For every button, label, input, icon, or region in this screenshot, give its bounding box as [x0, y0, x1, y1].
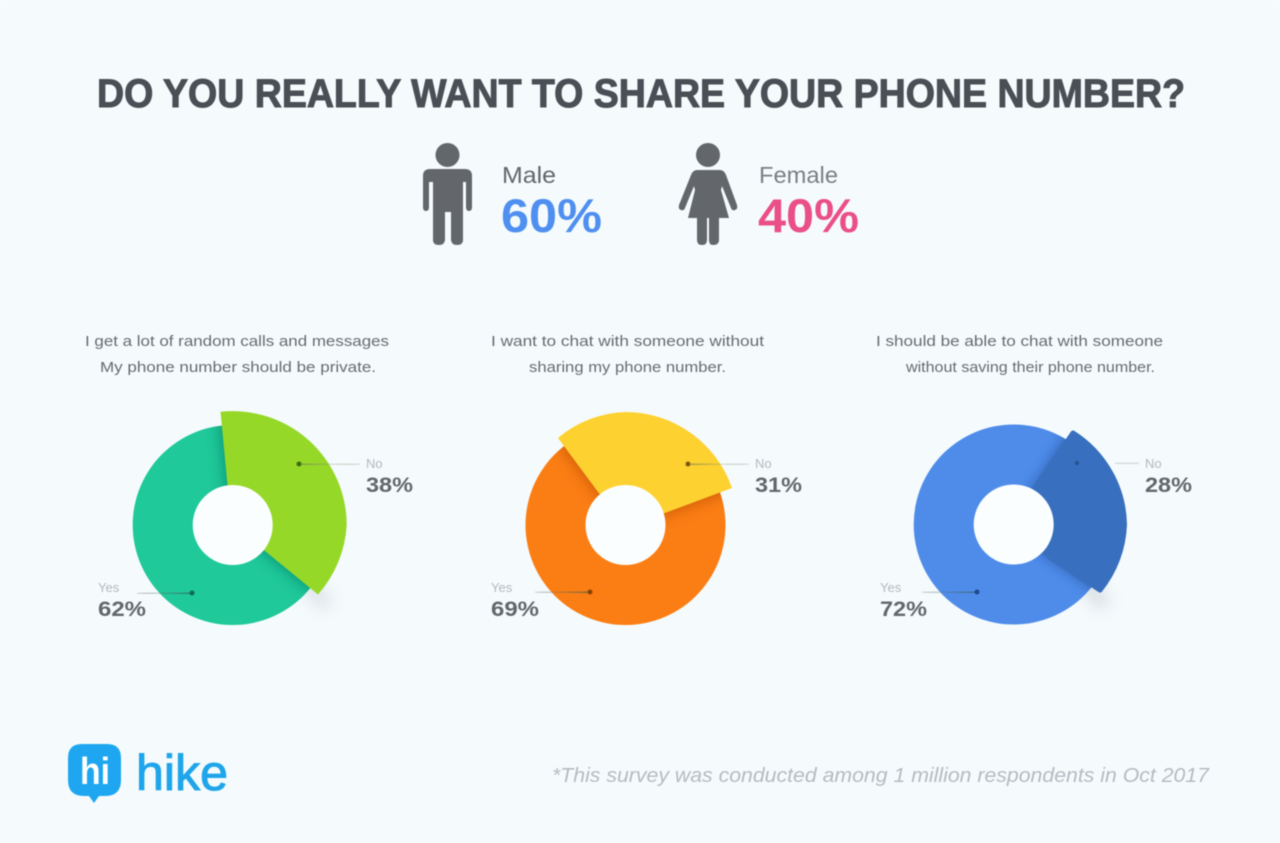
title: DO YOU REALLY WANT TO SHARE YOUR PHONE NUMBER? — [97, 72, 1185, 116]
caption: without saving their phone number. — [905, 359, 1155, 376]
caption: I get a lot of random calls and messages — [85, 333, 389, 350]
callout: no: No — [366, 456, 383, 471]
icon: male figure — [423, 143, 472, 245]
panel: chat without sharing question — [491, 333, 802, 625]
caption: I want to chat with someone without — [491, 333, 765, 350]
callout: yes: 69% — [491, 598, 539, 621]
caption: I should be able to chat with someone — [876, 333, 1163, 350]
callout: yes — [98, 580, 194, 621]
label: female: Female — [759, 162, 838, 188]
icon: hi speech bubble — [68, 744, 121, 803]
callout: no — [1075, 456, 1192, 497]
caption: sharing my phone number. — [529, 359, 726, 376]
callout: yes: 62% — [98, 598, 146, 621]
callout: yes: 72% — [880, 598, 927, 621]
callout: yes — [880, 580, 980, 621]
callout: no: 28% — [1145, 474, 1192, 497]
callout: no: 38% — [366, 474, 413, 497]
callout: no — [296, 456, 413, 497]
donut chart: yes 69 no 31 — [526, 412, 732, 625]
callout: no: No — [1145, 456, 1162, 471]
donut chart: yes 72 no 28 — [914, 424, 1126, 624]
wordmark: hike — [136, 745, 228, 801]
callout: yes: Yes — [880, 580, 902, 595]
callout: no — [686, 456, 802, 497]
panel: random calls question — [85, 333, 413, 625]
icon: hi speech bubble: hi — [80, 751, 110, 793]
panel: chat without saving question — [876, 333, 1192, 624]
donut chart: yes 62 no 38 — [133, 411, 347, 625]
value: male percent: 60% — [501, 189, 602, 242]
icon: female figure — [679, 143, 737, 245]
panel: female statistic — [679, 143, 859, 245]
panel: male statistic — [423, 143, 602, 245]
footnote: *This survey was conducted among 1 million respondents in Oct 2017 — [552, 765, 1210, 787]
callout: yes: Yes — [491, 580, 513, 595]
value: female percent: 40% — [758, 189, 859, 242]
logo: hike — [68, 744, 228, 803]
callout: no: 31% — [755, 474, 802, 497]
callout: yes — [491, 580, 592, 621]
caption: My phone number should be private. — [100, 359, 376, 376]
label: male: Male — [502, 162, 556, 188]
callout: no: No — [755, 456, 772, 471]
callout: yes: Yes — [98, 580, 120, 595]
